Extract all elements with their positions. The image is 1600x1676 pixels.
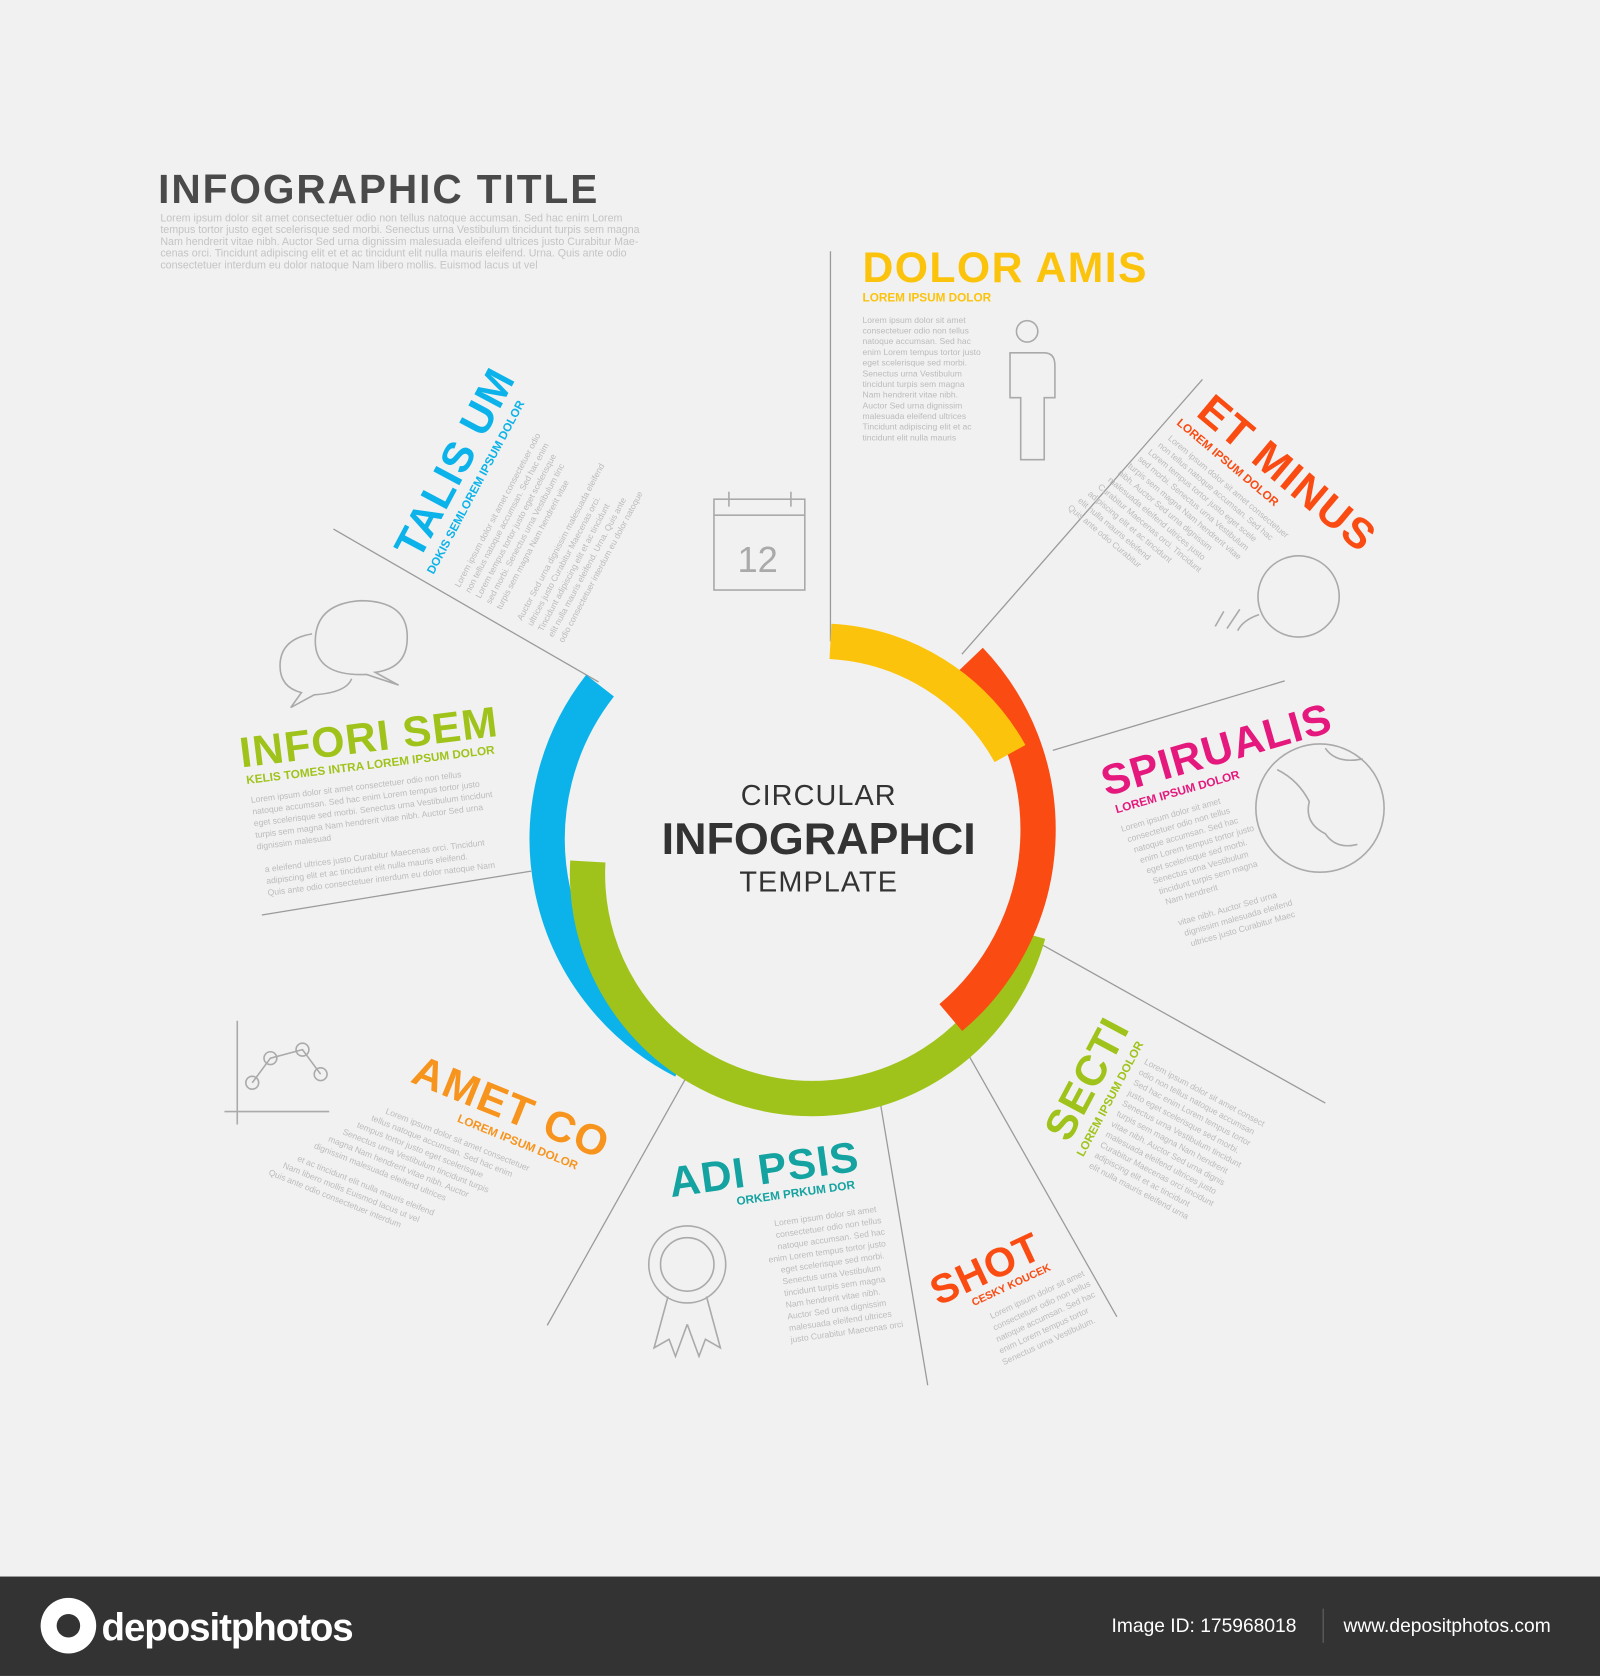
section: adi psis: consectetuer odio non tellus	[775, 1215, 882, 1240]
section: dolor amis: enim Lorem tempus tortor justo	[863, 347, 981, 357]
section: spirualis: ultrices justo Curabitur Maec	[1189, 909, 1297, 948]
section: et minus: malesuada eleifend ultrices justo	[1106, 475, 1208, 562]
section: spirualis: natoque accumsan. Sed hac	[1132, 815, 1240, 855]
section: adi psis: malesuada eleifend ultrices	[788, 1309, 892, 1333]
section: secti: Lorem ipsum dolor sit amet consect	[1143, 1056, 1267, 1129]
section: dolor amis: LOREM IPSUM DOLOR	[863, 291, 992, 304]
section: dolor amis: Lorem ipsum dolor sit amet	[863, 315, 966, 325]
section: secti: turpis sem magna Nam hendrerit	[1115, 1108, 1230, 1176]
section: secti: SECTI	[1035, 1010, 1139, 1148]
section: talis um	[383, 360, 805, 644]
title	[158, 166, 640, 271]
section: adi psis: Senectus urna Vestibulum	[782, 1263, 881, 1286]
section: et minus: Curabitur Maecenas orci. Tincidunt	[1096, 482, 1204, 575]
section: et minus: adipiscing elit et ac tincidunt	[1086, 489, 1175, 565]
section: spirualis	[1096, 694, 1384, 960]
center title: CIRCULAR	[741, 780, 897, 812]
section: et minus: Quis ante odio Curabitur	[1066, 502, 1144, 570]
title: Lorem ipsum dolor sit amet consectetuer odio non tellus natoque accumsan. Sed hac enim Lorem	[160, 212, 623, 224]
section: talis um: turpis sem magna Nam hendrerit vitae	[494, 478, 571, 611]
title: INFOGRAPHIC TITLE	[158, 166, 599, 212]
section: adi psis: Nam hendrerit vitae nibh.	[785, 1286, 881, 1310]
rays: panel folds	[262, 251, 1325, 1385]
section: secti: justo eget scelerisque sed morbi.	[1125, 1087, 1241, 1155]
section: spirualis: enim Lorem tempus tortor justo	[1139, 823, 1255, 865]
section: talis um: sed morbi. Senectus urna Vestibulum tinc	[484, 461, 567, 605]
red segment	[951, 660, 1038, 1018]
section: et minus	[1066, 362, 1386, 674]
title: tempus tortor justo eget scelerisque sed morbi. Senectus urna Vestibulum tincidunt turpis sem magna	[160, 224, 640, 236]
section: talis um: non tellus natoque accumsan. Sed hac enim	[463, 441, 551, 594]
section: talis um: Lorem tempus tortor justo eget scelerisque	[473, 452, 558, 600]
section: et minus: non tellus natoque accumsan. Sed hac	[1156, 440, 1276, 543]
section: shot: natoque accumsan. Sed hac	[994, 1289, 1097, 1344]
center title: TEMPLATE	[739, 866, 898, 898]
section: spirualis: Lorem ipsum dolor sit amet	[1120, 796, 1222, 834]
section: adi psis: natoque accumsan. Sed hac	[777, 1226, 886, 1251]
section: secti: adipiscing elit et ac tincidunt	[1093, 1150, 1192, 1209]
icon: person	[1010, 321, 1055, 460]
section: adi psis: enim Lorem tempus tortor justo	[768, 1238, 887, 1265]
green segment	[587, 862, 1028, 1099]
section: infori sem: dignissim malesuad	[256, 832, 332, 852]
section: amet co: tempus tortor justo eget scelerisque	[356, 1120, 485, 1180]
section: dolor amis: natoque accumsan. Sed hac	[863, 336, 972, 346]
section: dolor amis: Auctor Sed urna dignissim	[863, 400, 962, 410]
section: dolor amis: Nam hendrerit vitae nibh.	[863, 390, 958, 400]
section: amet co: Quis ante odio consectetuer interdum	[267, 1167, 403, 1230]
section: shot: Lorem ipsum dolor sit amet	[988, 1268, 1086, 1321]
section: spirualis: eget scelerisque sed morbi.	[1145, 837, 1248, 875]
section: dolor amis	[863, 244, 1148, 460]
section: adi psis: tincidunt turpis sem magna	[783, 1274, 886, 1298]
section: spirualis: LOREM IPSUM DOLOR	[1114, 768, 1242, 816]
section: talis um: Tincidunt adipiscing elit et ac tincidunt	[536, 501, 612, 633]
section: dolor amis: Senectus urna Vestibulum	[863, 368, 962, 378]
center title	[662, 780, 976, 898]
section: infori sem: INFORI SEM	[237, 698, 501, 777]
section: et minus: ET MINUS	[1188, 386, 1386, 562]
section: spirualis: Nam hendrerit	[1164, 882, 1219, 907]
section: adi psis: Auctor Sed urna dignissim	[787, 1298, 887, 1321]
section: infori sem: KELIS TOMES INTRA LOREM IPSUM DOLOR	[246, 744, 496, 787]
section: amet co: dignissim malesuada eleifend ultrices	[313, 1140, 448, 1203]
section: secti: malesuada eleifend ultrices justo	[1104, 1129, 1218, 1196]
section: secti: LOREM IPSUM DOLOR	[1074, 1039, 1147, 1159]
section: talis um: elit nulla mauris eleifend. Urna. Quis ante	[546, 496, 628, 639]
section: amet co: magna Nam hendrerit vitae nibh. Auctor	[327, 1134, 471, 1199]
section: spirualis: vitae nibh. Auctor Sed urna	[1177, 890, 1278, 928]
section: talis um: TALIS UM	[385, 360, 525, 566]
section: amet co: et ac tincidunt elit nulla mauris eleifend	[296, 1153, 436, 1218]
icon: globe	[1256, 744, 1384, 872]
section: amet co: Lorem ipsum dolor sit amet consectetuer	[384, 1106, 531, 1173]
section: spirualis: SPIRUALIS	[1096, 694, 1337, 806]
section: spirualis: Senectus urna Vestibulum	[1151, 849, 1250, 886]
footer bar	[0, 1577, 1600, 1676]
section: amet co	[224, 1010, 617, 1290]
section: dolor amis: eget scelerisque sed morbi.	[863, 358, 967, 368]
section: infori sem	[237, 601, 516, 899]
section: dolor amis: tincidunt turpis sem magna	[863, 379, 965, 389]
section: amet co: tellus natoque accumsan. Sed hac enim	[370, 1113, 514, 1179]
section: secti: Sed hac enim Lorem tempus tortor	[1132, 1077, 1253, 1148]
icon: award	[649, 1226, 726, 1356]
ring	[547, 641, 1038, 1099]
icon: bulb	[1215, 556, 1339, 637]
section: infori sem: natoque accumsan. Sed hac enim Lorem tempus tortor justo	[252, 779, 480, 817]
section: amet co: Senectus urna Vestibulum tincidunt turpis	[341, 1127, 490, 1195]
section: secti: Senectus urna Vestibulum tincidunt	[1121, 1098, 1244, 1170]
section: shot: Senectus urna Vestibulum.	[1000, 1315, 1097, 1367]
section: talis um: ultrices justo Curabitur Maecenas orci.	[525, 494, 602, 627]
section: secti	[1033, 1010, 1267, 1233]
section: adi psis: justo Curabitur Maecenas orci	[789, 1319, 904, 1345]
section: talis um: DOKIS SEMLOREM IPSUM DOLOR	[425, 398, 528, 576]
section: shot: SHOT	[923, 1223, 1048, 1314]
icon: speech bubbles	[280, 601, 407, 708]
section: amet co: LOREM IPSUM DOLOR	[456, 1112, 580, 1173]
section: dolor amis: tincidunt elit nulla mauris	[863, 432, 956, 442]
section: infori sem: eget scelerisque sed morbi. Senectus urna Vestibulum tincidunt	[253, 789, 494, 828]
section: et minus: turpis sem magna Nam hendrerit vitae	[1126, 461, 1244, 562]
section: shot: enim Lorem tempus tortor	[997, 1305, 1090, 1356]
section: et minus: sed morbi. Senectus urna Vestibulum	[1136, 454, 1251, 553]
section: infori sem: Quis ante odio consectetuer interdum eu dolor natoque Nam	[267, 860, 496, 898]
section: infori sem: Lorem ipsum dolor sit amet consectetuer odio non tellus	[250, 769, 462, 805]
section: shot: consectetuer odio non tellus	[991, 1278, 1092, 1332]
section: et minus: elit nulla mauris eleifend	[1076, 496, 1153, 562]
title: Nam hendrerit vitae nibh. Auctor Sed urna dignissim malesuada eleifend ultrices justo Curabitur Mae-	[160, 236, 639, 248]
section: adi psis: Lorem ipsum dolor sit amet	[774, 1204, 878, 1228]
section: infori sem: turpis sem magna Nam hendrerit vitae nibh. Auctor Sed urna	[255, 802, 484, 840]
center title: INFOGRAPHCI	[662, 813, 976, 864]
icon: calendar	[714, 492, 805, 590]
icon: chart	[224, 1021, 329, 1124]
section: adi psis: ORKEM PRKUM DOR	[736, 1179, 856, 1208]
section: shot	[923, 1210, 1107, 1382]
section: secti: Curabitur Maecenas orci tincidunt	[1099, 1139, 1216, 1208]
section: spirualis: dignissim malesuada eleifend	[1183, 897, 1294, 938]
icon: calendar: 12	[737, 539, 778, 580]
blue segment	[547, 686, 683, 1061]
section: adi psis: eget scelerisque sed morbi.	[780, 1250, 885, 1275]
section: dolor amis: consectetuer odio non tellus	[863, 326, 969, 336]
footer bar: Image ID: 175968018	[1112, 1616, 1296, 1637]
section: et minus: Lorem tempus tortor justo eget scele	[1146, 447, 1259, 544]
section: adi psis: ADI PSIS	[666, 1133, 862, 1207]
section: et minus: Lorem ipsum dolor sit amet consectetuer	[1166, 433, 1291, 540]
section: shot: CESKY KOUCEK	[970, 1262, 1053, 1309]
yellow segment	[830, 641, 1010, 754]
title: consectetuer interdum eu dolor natoque Nam libero mollis. Euismod lacus ut vel	[160, 259, 538, 271]
section: secti: elit nulla mauris eleifend urna	[1087, 1160, 1191, 1221]
footer bar: depositphotos	[102, 1607, 353, 1650]
section: infori sem: a eleifend ultrices justo Curabitur Maecenas orci. Tincidunt	[264, 837, 486, 874]
title: cenas orci. Tincidunt adipiscing elit et et ac tincidunt elit nulla mauris eleifend. Urna. Quis ante odio	[160, 248, 627, 260]
section: et minus: LOREM IPSUM DOLOR	[1174, 416, 1281, 509]
section: secti: vitae nibh. Auctor Sed urna dignis	[1110, 1119, 1227, 1187]
section: amet co: AMET CO	[406, 1046, 617, 1169]
section: spirualis: tincidunt turpis sem magna	[1158, 858, 1259, 896]
section: talis um: Auctor Sed urna dignissim malesuada eleifend	[515, 461, 607, 622]
footer bar: www.depositphotos.com	[1342, 1616, 1551, 1637]
section: adi psis	[649, 1133, 904, 1356]
section: et minus: nibh. Auctor Sed urna dignissim	[1116, 468, 1215, 553]
section: dolor amis: Tincidunt adipiscing elit et ac	[863, 422, 972, 432]
section: secti: odio non tellus natoque accumsan	[1137, 1067, 1257, 1137]
section: dolor amis: DOLOR AMIS	[863, 244, 1148, 292]
section: talis um: odio consectetuer interdum eu dolor natoque	[556, 489, 645, 644]
section: amet co: Nam libero mollis Euismod lacus ut vel	[282, 1160, 421, 1224]
section: spirualis: consectetuer odio non tellus	[1126, 805, 1231, 844]
section: infori sem: adipiscing elit et ac tincidunt elit nulla mauris eleifend.	[266, 851, 468, 886]
section: dolor amis: malesuada eleifend ultrices	[863, 411, 966, 421]
section: talis um: Lorem ipsum dolor sit amet consectetuer odio	[453, 431, 543, 589]
